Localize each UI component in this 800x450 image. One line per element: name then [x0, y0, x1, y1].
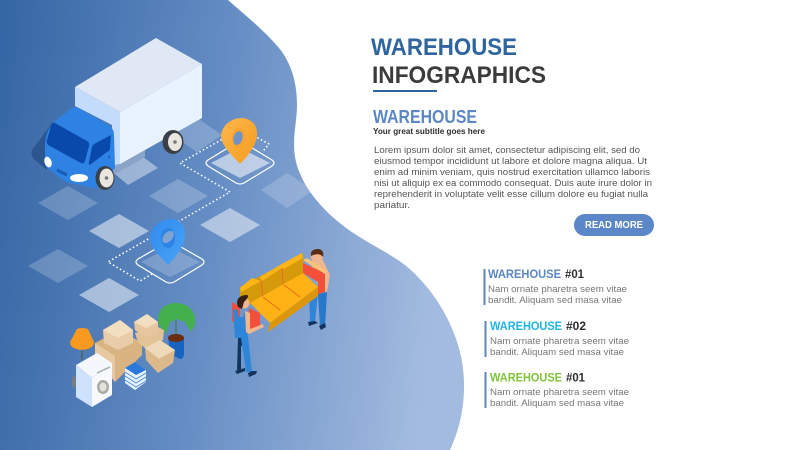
list item 1: #01: [565, 269, 585, 281]
body paragraph: Lorem ipsum dolor sit amet, consectetur adipiscing elit, sed do: [374, 144, 640, 155]
list item 2: [484, 321, 629, 357]
subtitle: Your great subtitle goes here: [373, 126, 485, 136]
list item 2: bandit. Aliquam sed masa vitae: [490, 347, 624, 357]
button: read more: [574, 214, 654, 236]
title: INFOGRAPHICS: [372, 62, 546, 89]
floor tiles: [28, 118, 314, 312]
section heading: WAREHOUSE: [373, 107, 477, 127]
list item 2: WAREHOUSE: [490, 321, 562, 333]
body paragraph: eiusmod tempor incididunt ut labore et dolore magna aliqua. Ut: [374, 155, 647, 166]
body paragraph: enim ad minim veniam, quis nostrud exercitation ullamco laboris: [374, 166, 650, 177]
icon: delivery truck: [31, 38, 202, 190]
person rear: [308, 249, 330, 330]
body paragraph: nisi ut aliquip ex ea commodo consequat. Duis aute irure dolor in: [374, 177, 652, 188]
list item 3: #01: [566, 372, 586, 384]
panel: blue wave background: [0, 0, 464, 450]
body paragraph: reprehenderit in voluptate velit esse cillum dolore eu fugiat nulla: [374, 188, 649, 199]
list item 2: #02: [566, 321, 586, 333]
title: [371, 34, 546, 89]
box stacks: [95, 314, 175, 382]
list item 2: Nam ornate pharetra seem vitae: [490, 336, 629, 346]
list item 3: WAREHOUSE: [490, 372, 562, 384]
dotted route: [108, 138, 269, 281]
person front: [233, 295, 264, 377]
plant: [158, 303, 195, 359]
list item 1: [484, 269, 627, 305]
title underline: [373, 90, 437, 92]
icon: two movers carrying sofa: [232, 249, 330, 377]
button: read more: READ MORE: [585, 220, 643, 231]
icon: moving boxes, plant, lamp, washing machine: [70, 303, 195, 407]
body paragraph: [374, 144, 652, 210]
list item 1: WAREHOUSE: [488, 269, 561, 281]
list item 3: Nam ornate pharetra seem vitae: [490, 387, 629, 397]
washing machine: [76, 353, 112, 407]
list item 1: Nam ornate pharetra seem vitae: [488, 284, 627, 294]
title: WAREHOUSE: [371, 34, 517, 61]
list item 3: bandit. Aliquam sed masa vitae: [490, 398, 624, 408]
lamp: [70, 328, 94, 388]
sofa: [232, 253, 326, 333]
list item 1: bandit. Aliquam sed masa vitae: [488, 295, 622, 305]
blue location marker: [136, 219, 204, 283]
list item 3: [484, 372, 629, 408]
body paragraph: pariatur.: [374, 199, 410, 210]
orange location marker: [206, 118, 274, 184]
stack of documents: [125, 362, 146, 390]
